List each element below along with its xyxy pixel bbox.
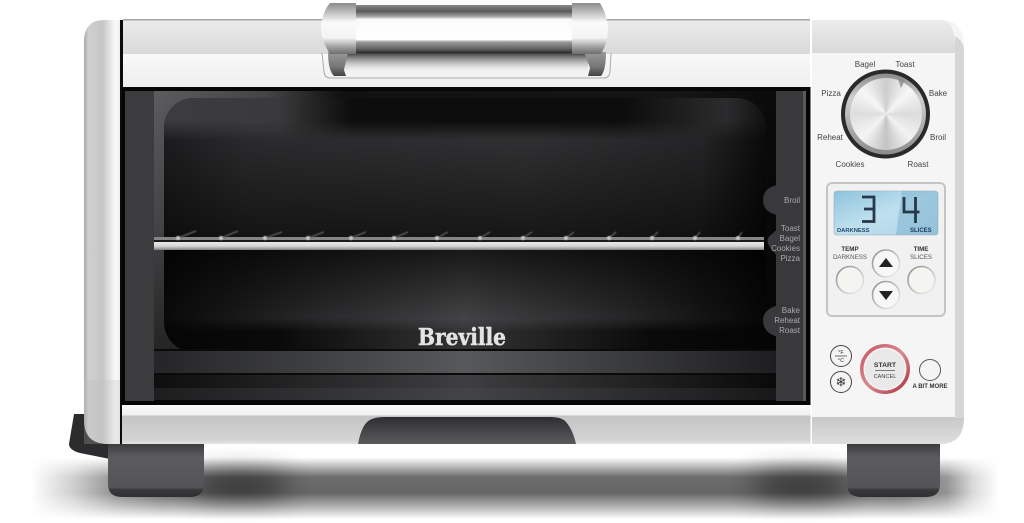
rear power cord bracket [69, 414, 110, 459]
shelf position labels: Bagel [780, 234, 800, 243]
oven body [84, 19, 964, 444]
shelf position labels: Broil [784, 196, 800, 205]
selector dial [841, 70, 930, 158]
inner cavity [154, 91, 777, 352]
right door frame [776, 91, 803, 401]
lower rack runners [154, 349, 776, 400]
shelf position labels: Pizza [780, 254, 801, 263]
Breville logo: Breville [418, 324, 506, 351]
LCD display: SLICES [910, 228, 932, 234]
left door frame [125, 91, 154, 401]
start cancel button: CANCEL [874, 374, 896, 380]
dial labels: Pizza [821, 89, 841, 98]
dial labels: Bake [929, 89, 948, 98]
temperature unit button: °C [838, 358, 844, 364]
frozen button: ❄ [836, 376, 846, 390]
shelf position labels: Toast [781, 224, 801, 233]
dial labels: Bagel [855, 60, 875, 69]
dial labels: Broil [930, 133, 946, 142]
top strip [123, 19, 810, 87]
shelf position labels: Cookies [771, 244, 800, 253]
rack [154, 231, 764, 250]
temperature unit button: °F [838, 350, 844, 356]
control labels [833, 246, 932, 261]
dial labels: Reheat [817, 133, 844, 142]
left foot [108, 444, 204, 497]
start cancel button [860, 344, 910, 394]
shelf position labels: Reheat [774, 316, 801, 325]
shelf position labels [763, 184, 802, 338]
left side panel [84, 20, 121, 444]
right foot [847, 444, 940, 497]
control labels: TEMP [841, 246, 859, 253]
cavity frame [154, 91, 777, 351]
dial labels [817, 60, 948, 169]
rack pegs [176, 231, 742, 240]
door handle recess [358, 417, 576, 444]
LCD display [834, 191, 938, 235]
dial labels: Cookies [836, 160, 864, 169]
a bit more button: A BIT MORE [912, 384, 948, 390]
control sub-panel [827, 183, 945, 316]
temperature unit button [830, 346, 852, 366]
control panel [810, 20, 964, 444]
control labels: SLICES [910, 254, 932, 261]
control labels: DARKNESS [833, 254, 867, 261]
oven door window [122, 87, 811, 405]
dial labels: Roast [908, 160, 929, 169]
a bit more button [912, 360, 948, 390]
dial labels: Toast [895, 60, 915, 69]
frozen button [830, 372, 852, 392]
top handle [321, 3, 611, 78]
buttons [836, 250, 935, 308]
shelf position labels: Roast [779, 326, 801, 335]
shelf position labels: Bake [782, 306, 801, 315]
LCD display: DARKNESS [837, 228, 870, 234]
start cancel button: START [874, 362, 897, 369]
floor shadow [0, 444, 1024, 523]
control labels: TIME [914, 246, 928, 253]
bottom door strip [122, 405, 811, 444]
